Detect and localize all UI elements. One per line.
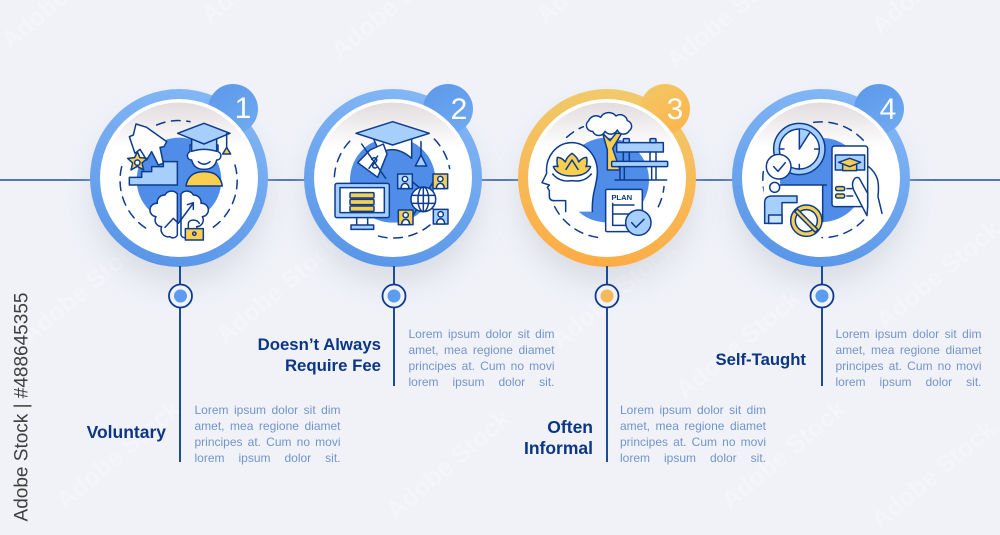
text block: step 4: lorem ipsum dolor sit. xyxy=(836,375,982,389)
stock id label: Adobe Stock | #488645355 xyxy=(12,293,32,521)
text block: step 1 xyxy=(194,403,340,465)
text block: step 4: Lorem ipsum dolor sit dim xyxy=(836,327,982,341)
text: Adobe Stock xyxy=(716,395,851,515)
connector and marker 1 xyxy=(169,266,192,462)
text block: step 3: Lorem ipsum dolor sit dim xyxy=(620,403,766,417)
text: Adobe Stock xyxy=(16,230,151,350)
text block: step 3: lorem ipsum dolor sit. xyxy=(620,451,766,465)
heading: Doesn't Always Require Fee: Require Fee xyxy=(285,356,381,374)
heading: Doesn't Always Require Fee: Doesn’t Always xyxy=(258,335,381,354)
text block: step 4: amet, mea regione diamet xyxy=(836,343,982,357)
icon: mindful informal practice xyxy=(542,113,668,238)
text block: step 3 xyxy=(620,403,766,465)
heading: Self-Taught: Self-Taught xyxy=(715,350,806,369)
icon: self-taught study xyxy=(763,122,882,238)
text: Adobe Stock xyxy=(671,285,806,405)
text block: step 3: amet, mea regione diamet xyxy=(620,419,766,433)
text block: step 1: Lorem ipsum dolor sit dim xyxy=(194,403,340,417)
step 4 number: 4 xyxy=(880,93,896,126)
text block: step 2: Lorem ipsum dolor sit dim xyxy=(408,327,554,341)
heading: Voluntary: Voluntary xyxy=(87,422,166,442)
connector and marker 2 xyxy=(382,266,406,386)
text: Adobe Stock xyxy=(546,235,681,355)
icon: mindful informal practice: PLAN xyxy=(611,193,633,202)
text block: step 2 xyxy=(408,327,554,389)
step 1 circle xyxy=(90,84,268,284)
heading: Often Informal: Informal xyxy=(524,438,593,458)
text block: step 3: principes at. Cum no movi xyxy=(620,435,766,449)
text block: step 1: lorem ipsum dolor sit. xyxy=(194,451,340,465)
text block: step 2: amet, mea regione diamet xyxy=(408,343,554,357)
heading: Often Informal: Often xyxy=(547,417,593,437)
step 2 number: 2 xyxy=(451,93,467,126)
text block: step 1: principes at. Cum no movi xyxy=(194,435,340,449)
heading: Often Informal xyxy=(524,417,593,458)
heading: Doesn't Always Require Fee xyxy=(258,335,381,374)
connector and marker 4 xyxy=(810,266,834,386)
step 3 circle xyxy=(518,84,696,284)
step 1 number: 1 xyxy=(235,92,251,125)
text: Adobe Stock xyxy=(866,415,1000,535)
step 3 number: 3 xyxy=(667,93,683,126)
step 4 circle xyxy=(732,84,910,284)
text block: step 4 xyxy=(836,327,982,389)
step 2 circle xyxy=(304,84,482,284)
text block: step 1: amet, mea regione diamet xyxy=(194,419,340,433)
text: Adobe Stock xyxy=(51,395,186,515)
icon: voluntary learning xyxy=(120,121,237,240)
connector and marker 3 xyxy=(596,266,618,462)
text: Adobe Stock xyxy=(211,230,346,350)
text: Adobe Stock xyxy=(381,405,516,525)
text block: step 2: lorem ipsum dolor sit. xyxy=(408,375,554,389)
icon: free online education xyxy=(334,122,450,238)
text block: step 2: principes at. Cum no movi xyxy=(408,359,554,373)
text block: step 4: principes at. Cum no movi xyxy=(836,359,982,373)
